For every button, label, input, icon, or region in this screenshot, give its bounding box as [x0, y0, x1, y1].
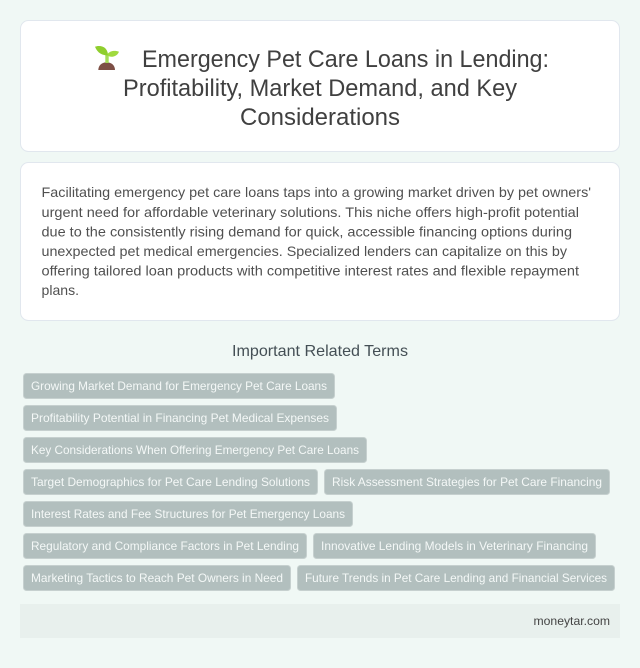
- tag: marketing tactics: [24, 566, 290, 590]
- heading: important related terms: Important Related Terms: [232, 343, 408, 360]
- tag: growing market demand: [24, 374, 334, 398]
- text block: description paragraph: unexpected pet medical emergencies. Specialized lenders can capitalize on this by: [42, 243, 567, 259]
- tag: future trends: Future Trends in Pet Care Lending and Financial Services: [305, 571, 607, 585]
- panel: title header: [20, 20, 620, 152]
- tag: target demographics: Target Demographics for Pet Care Lending Solutions: [31, 475, 310, 489]
- tag: interest rates: [24, 502, 352, 526]
- tag: key considerations: [24, 438, 366, 462]
- icon: seedling: [95, 46, 119, 70]
- panel: description: [20, 162, 620, 320]
- heading: title: Profitability, Market Demand, and Key: [123, 75, 517, 102]
- tag: innovative lending: Innovative Lending Models in Veterinary Financing: [321, 539, 588, 553]
- text block: description paragraph: urgent need for affordable veterinary solutions. This niche offers high-profit potential: [42, 204, 579, 220]
- heading: title: [123, 46, 549, 131]
- heading: title: Emergency Pet Care Loans in Lending:: [142, 46, 549, 73]
- text block: description paragraph: [42, 184, 591, 298]
- text block: description paragraph: due to the consistently rising demand for quick, accessible financing options during: [42, 224, 572, 240]
- tag: growing market demand: Growing Market Demand for Emergency Pet Care Loans: [31, 379, 327, 393]
- text block: description paragraph: Facilitating emergency pet care loans taps into a growing market driven by pet owners': [42, 184, 591, 200]
- tag: interest rates: Interest Rates and Fee Structures for Pet Emergency Loans: [31, 507, 345, 521]
- tag: marketing tactics: Marketing Tactics to Reach Pet Owners in Need: [31, 571, 283, 585]
- tag: regulatory factors: Regulatory and Compliance Factors in Pet Lending: [31, 539, 299, 553]
- tag: profitability potential: [24, 406, 336, 430]
- footer: [20, 604, 620, 638]
- heading: title: Considerations: [240, 104, 400, 131]
- tag: target demographics: [24, 470, 318, 494]
- tag: key considerations: Key Considerations When Offering Emergency Pet Care Loans: [31, 443, 359, 457]
- tag: regulatory factors: [24, 534, 306, 558]
- text block: description paragraph: plans.: [42, 282, 79, 298]
- tag: future trends: [298, 566, 614, 590]
- footer source text: moneytar.com: [534, 614, 610, 628]
- tag: innovative lending: [314, 534, 596, 558]
- tag: profitability potential: Profitability Potential in Financing Pet Medical Expenses: [31, 411, 329, 425]
- tag: risk assessment: Risk Assessment Strategies for Pet Care Financing: [332, 475, 602, 489]
- tag: risk assessment: [324, 470, 610, 494]
- tag list: related terms: [24, 374, 614, 590]
- text block: description paragraph: offering tailored loan products with competitive interest rates and flexible repayment: [42, 262, 579, 278]
